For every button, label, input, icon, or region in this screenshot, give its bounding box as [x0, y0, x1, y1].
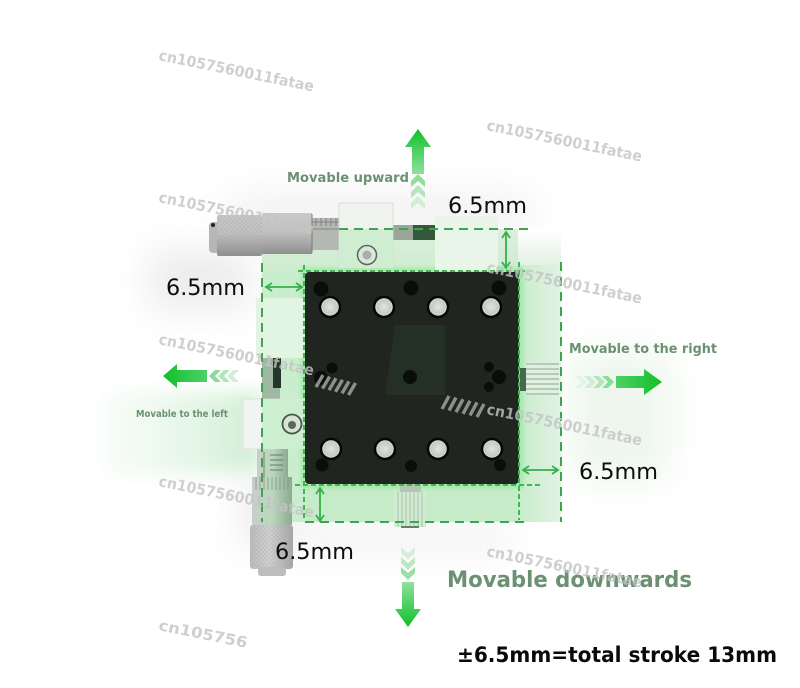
dashed travel outline — [262, 229, 561, 522]
dimension arrow: left — [266, 283, 302, 291]
arrow: left — [163, 364, 239, 388]
watermarks: cn1057560011fatae — [485, 542, 644, 591]
arrow: up — [405, 129, 431, 209]
dimension: left 6.5mm: 6.5mm — [166, 275, 245, 301]
black plate — [305, 272, 519, 484]
green travel zone — [262, 229, 561, 522]
label: movable upward: Movable upward — [287, 171, 409, 186]
watermarks: cn1057560011fatae — [157, 330, 316, 379]
watermarks: cn1057560011fatae — [485, 116, 644, 165]
watermarks — [157, 46, 644, 652]
dimension arrow: bottom — [316, 488, 324, 521]
label: movable to the right: Movable to the right — [569, 342, 717, 357]
knob: bottom — [394, 484, 426, 528]
arrow: down — [395, 547, 421, 627]
dimension arrow: right — [523, 466, 558, 474]
dimension arrow: top — [502, 232, 510, 268]
watermarks: cn1057560011fatae — [157, 472, 316, 521]
arrow: right — [575, 369, 662, 395]
total stroke statement: ±6.5mm=total stroke 13mm — [457, 643, 777, 667]
watermarks: cn1057560011fatae — [485, 258, 644, 307]
label: movable downwards: Movable downwards — [447, 568, 692, 593]
knob: right — [520, 362, 559, 395]
watermarks: cn1057560011fatae — [485, 400, 644, 449]
dimension: bottom 6.5mm: 6.5mm — [275, 539, 354, 565]
watermarks: cn105756 — [157, 616, 249, 652]
dimension: right 6.5mm: 6.5mm — [579, 459, 658, 485]
hatch marks — [316, 375, 484, 417]
plate screws — [320, 297, 502, 459]
watermarks: cn1057560011fatae — [157, 46, 316, 95]
label: movable to the left: Movable to the left — [136, 409, 228, 420]
watermarks: cn1057560011fatae — [157, 188, 316, 237]
micrometer: top — [209, 203, 498, 271]
micrometer: left — [243, 298, 305, 576]
plate holes — [314, 280, 506, 472]
dimension: top 6.5mm: 6.5mm — [448, 193, 527, 219]
